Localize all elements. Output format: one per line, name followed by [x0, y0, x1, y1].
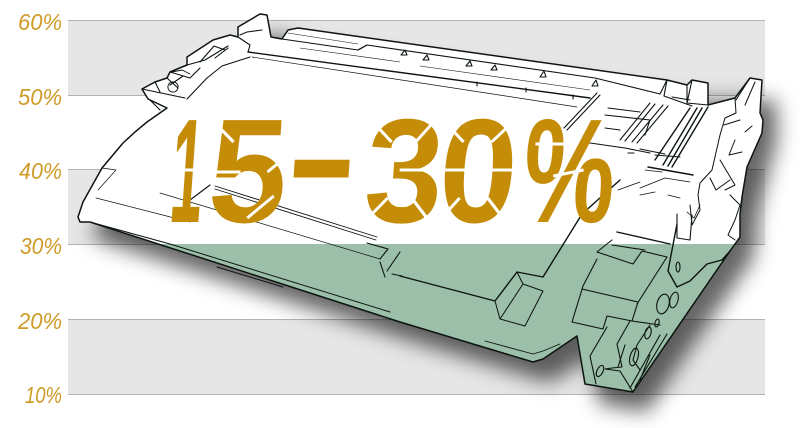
axis labels: 30% — [20, 233, 62, 259]
left edge details — [96, 168, 380, 259]
chart bands and grid — [68, 20, 765, 394]
green 15-30 percent range fill — [161, 244, 734, 391]
left latch mechanics — [142, 30, 262, 110]
axis labels: 50% — [18, 84, 62, 110]
headline value: 15-30%: 3 — [360, 89, 449, 254]
main recess — [400, 180, 620, 301]
cartridge drop shadow — [92, 34, 777, 412]
headline value: 15-30%: 1 — [166, 89, 209, 254]
end-cap plate — [617, 224, 730, 287]
cartridge body — [78, 14, 763, 392]
headline value: 15-30%: 0 — [434, 89, 523, 254]
headline value: 15-30%: - — [281, 74, 364, 239]
segment gaps over the digits — [165, 118, 587, 222]
axis labels: 20% — [17, 308, 62, 334]
headline value: 15-30% — [163, 74, 622, 254]
axis labels: 60% — [18, 9, 62, 35]
axis labels — [17, 9, 62, 408]
axis labels: 10% — [25, 382, 62, 408]
right side mechanism — [564, 93, 668, 143]
cartridge line art — [78, 14, 763, 392]
headline value: 15-30%: 5 — [204, 89, 293, 254]
headline value: 15-30%: % — [518, 89, 621, 254]
top rail lines — [282, 39, 660, 94]
axis labels: 40% — [19, 158, 62, 184]
